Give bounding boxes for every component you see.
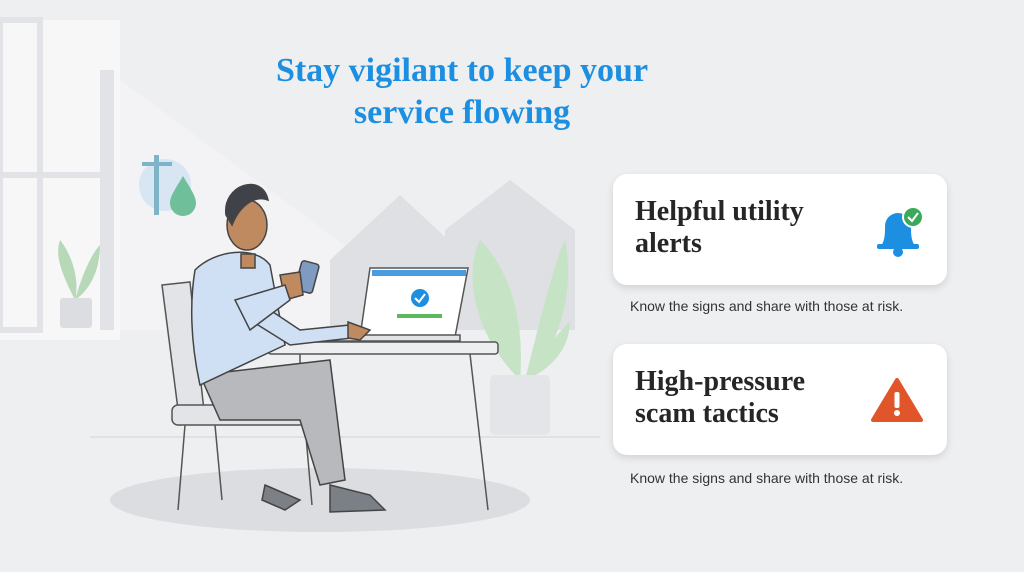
card: helpful utility alerts [613,174,947,285]
plant right [473,240,571,435]
window [0,20,460,340]
caption 2: Know the signs and share with those at risk. [630,470,903,486]
card: high-pressure scam tactics [613,344,947,455]
scene illustration [0,17,600,532]
card: high-pressure scam tactics: scam tactics [635,398,779,429]
houses background [330,180,575,330]
floor shadow [110,468,530,532]
icon: warning triangle [871,378,923,422]
icon: bell with check [877,208,922,257]
floor line [90,436,600,438]
desk [268,342,498,510]
plant left [58,240,100,328]
icon: utility pole and water drop [139,155,196,216]
title: Stay vigilant to keep your service flowing [276,52,648,131]
card: helpful utility alerts: Helpful utility [635,196,804,227]
card: high-pressure scam tactics: High-pressure [635,366,805,397]
card: helpful utility alerts: alerts [635,228,702,259]
person [192,185,385,512]
laptop [320,268,468,341]
chair [162,282,322,510]
caption 1: Know the signs and share with those at risk. [630,298,903,314]
